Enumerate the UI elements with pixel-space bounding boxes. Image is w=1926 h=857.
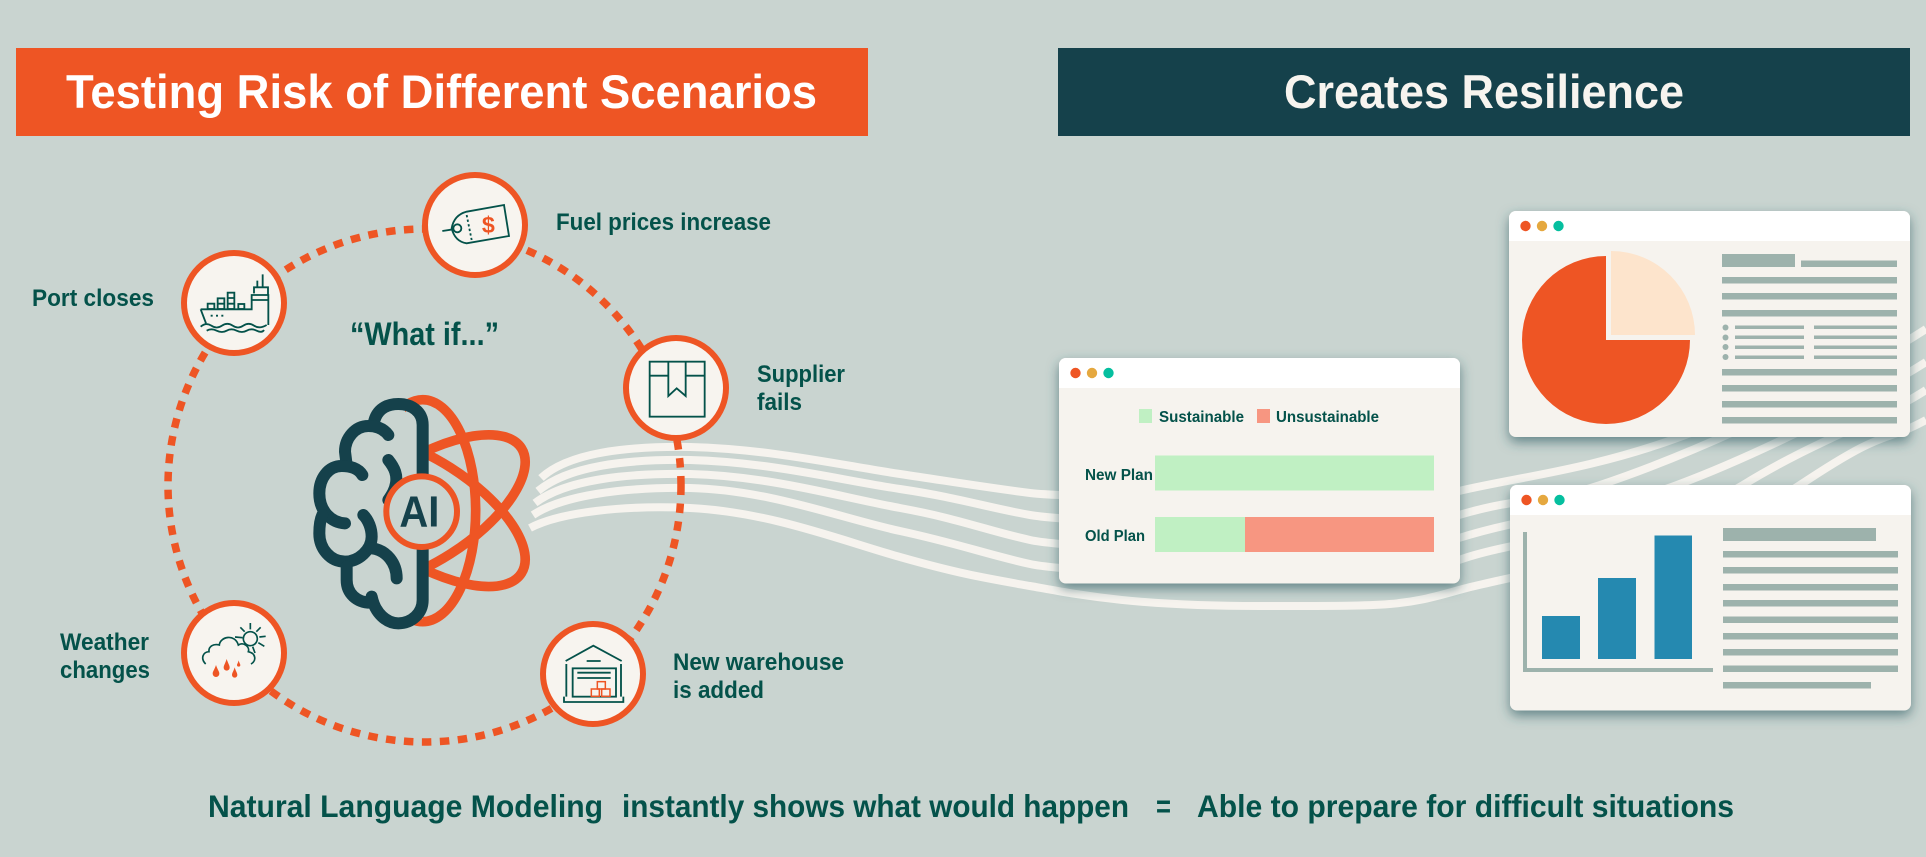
footer statement: Natural Language Modeling bbox=[208, 788, 603, 824]
data streams flowing from AI to dashboards bbox=[530, 329, 1926, 606]
icon: supplier box bbox=[626, 338, 726, 438]
placeholder text lines bbox=[1722, 254, 1897, 424]
AI badge bbox=[386, 476, 457, 547]
label: Fuel prices increase: Fuel prices increase bbox=[556, 209, 771, 236]
label: Port closes: Port closes bbox=[32, 285, 154, 312]
label: What if: “What if...” bbox=[350, 316, 499, 352]
label: New warehouse is added bbox=[673, 649, 844, 704]
label: Weather changes bbox=[60, 629, 150, 684]
legend bbox=[1139, 409, 1379, 426]
footer statement: Able to prepare for difficult situations bbox=[1197, 788, 1734, 824]
icon: price tag bbox=[425, 175, 525, 275]
label: Supplier fails bbox=[757, 361, 845, 416]
icon: container ship bbox=[184, 253, 284, 353]
legend: Unsustainable bbox=[1276, 409, 1379, 426]
bar: Old Plan: Old Plan bbox=[1085, 528, 1145, 545]
icon: price tag: $ bbox=[482, 212, 495, 238]
pie chart bbox=[1522, 251, 1695, 424]
atom orbits bbox=[405, 394, 530, 626]
icon: weather bbox=[184, 603, 284, 703]
dashed scenario ring bbox=[168, 229, 681, 742]
label: Supplier fails: Supplier bbox=[757, 361, 845, 388]
panel: pie chart window bbox=[1509, 211, 1910, 437]
panel: bar chart window bbox=[1510, 485, 1911, 710]
bar: Old Plan bbox=[1085, 517, 1434, 552]
brain bbox=[319, 404, 423, 623]
label: Supplier fails: fails bbox=[757, 389, 802, 416]
placeholder text lines bbox=[1723, 528, 1898, 688]
footer statement: = bbox=[1156, 788, 1171, 824]
icon: AI brain and atom bbox=[298, 400, 549, 623]
label: New warehouse is added: is added bbox=[673, 677, 764, 704]
footer statement: instantly shows what would happen bbox=[622, 788, 1129, 824]
label: Weather changes: changes bbox=[60, 657, 150, 684]
heading: Testing Risk of Different Scenarios: Testing Risk of Different Scenarios bbox=[66, 65, 817, 118]
footer statement bbox=[208, 788, 1734, 824]
bar: New Plan: New Plan bbox=[1085, 467, 1153, 484]
bar: New Plan bbox=[1085, 456, 1434, 490]
heading: Creates Resilience: Creates Resilience bbox=[1284, 65, 1684, 118]
icon: warehouse bbox=[543, 624, 643, 724]
heading: Creates Resilience bbox=[1058, 48, 1910, 136]
panel: plan comparison window bbox=[1059, 358, 1460, 584]
label: Weather changes: Weather bbox=[60, 629, 149, 656]
label: New warehouse is added: New warehouse bbox=[673, 649, 844, 676]
legend: Sustainable bbox=[1159, 409, 1244, 426]
heading: Testing Risk of Different Scenarios bbox=[16, 48, 868, 136]
bar chart bbox=[1523, 532, 1713, 672]
AI badge: AI bbox=[399, 488, 439, 537]
